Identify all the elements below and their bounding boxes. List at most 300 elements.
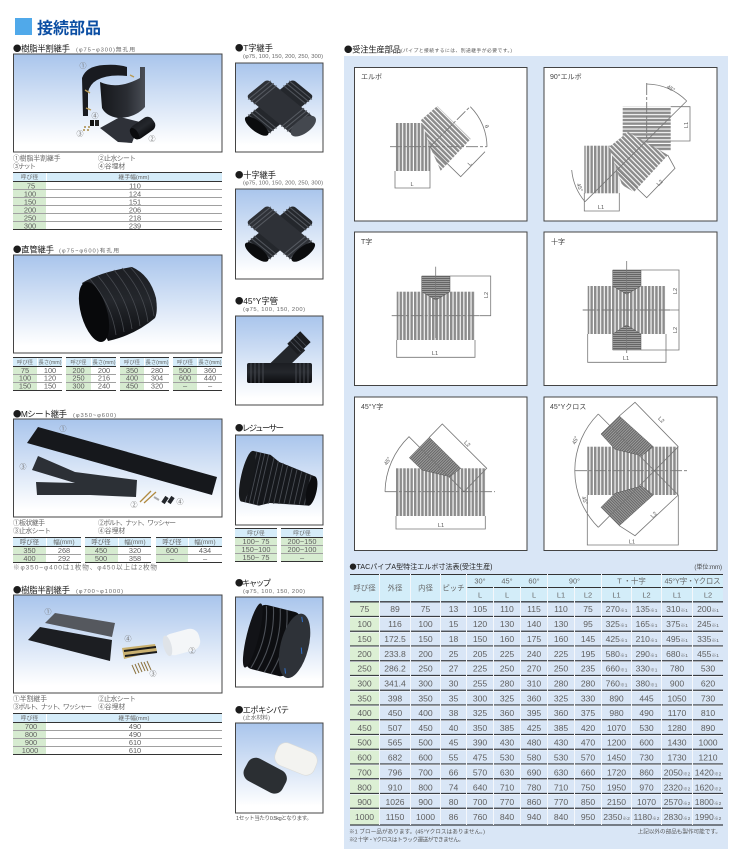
- tables: 長さ: 360: [204, 366, 216, 375]
- table: elbow dimensions: 310: [527, 678, 541, 688]
- table: elbow dimensions: 1730: [667, 752, 687, 762]
- table: elbow dimensions: 970: [639, 782, 654, 792]
- table: elbow dimensions: 350: [357, 693, 372, 703]
- table: elbow dimensions: 780: [527, 782, 541, 792]
- table: elbow dimensions: 682: [388, 752, 402, 762]
- table: reducer sizes: 150~100: [242, 545, 270, 554]
- tables: 幅: 幅(mm): [53, 537, 75, 546]
- tables: 長さ: 呼び径: [177, 358, 194, 366]
- table: elbow dimensions: 1720: [607, 767, 626, 777]
- table: elbow dimensions: L1: [673, 590, 681, 600]
- table: elbow dimensions: T ・十字: [617, 576, 646, 586]
- table: elbow dimensions: 350: [418, 693, 433, 703]
- table: elbow dimensions: 内径: [418, 584, 433, 592]
- table: 継手幅: 124: [129, 190, 141, 198]
- table: elbow dimensions: 210※1: [636, 634, 657, 644]
- table: elbow dimensions: 270: [527, 664, 541, 674]
- tables: 長さ: 300: [72, 381, 85, 390]
- table: elbow dimensions: 900: [418, 797, 433, 807]
- table: elbow dimensions: 398: [388, 693, 402, 703]
- table: elbow dimensions: 445: [639, 693, 654, 703]
- table: elbow dimensions: 530: [701, 664, 715, 674]
- note: 1セット当たり0.5kgとなります。: [236, 814, 312, 822]
- table: elbow dimensions: 290※1: [636, 649, 657, 659]
- tables: 幅: 呼び径: [162, 537, 182, 546]
- table: elbow dimensions: 700: [357, 767, 372, 777]
- tables: 長さ: 216: [98, 374, 110, 382]
- table: elbow dimensions: 105: [473, 604, 487, 614]
- tables: 長さ: 350: [126, 366, 138, 375]
- diagram: 90°エルボ: 45°: [575, 183, 583, 193]
- tables: 長さ: 呼び径: [17, 358, 34, 366]
- product photo: M-sheet joint: ④: [176, 498, 184, 506]
- tables: 幅: 幅(mm): [194, 537, 216, 546]
- table: elbow dimensions: L: [532, 590, 536, 600]
- table: elbow dimensions: 1000: [355, 812, 374, 822]
- panel: 直管継手: [13, 244, 222, 390]
- table: elbow dimensions: 233.8: [384, 649, 406, 659]
- table: elbow dimensions: [350, 574, 723, 825]
- table: elbow dimensions: 1070: [637, 797, 656, 807]
- product photo: half-split joint: ③: [76, 130, 84, 138]
- captions: ④谷埋材: [98, 162, 125, 170]
- table: elbow dimensions: 300: [418, 678, 433, 688]
- table: 継手幅: [13, 172, 222, 230]
- table: elbow dimensions: 395: [527, 708, 541, 718]
- table: elbow dimensions: 750: [581, 782, 595, 792]
- table: elbow dimensions: 660※1: [606, 664, 627, 674]
- product photo: large half-split joint: ①: [44, 608, 52, 616]
- table: elbow dimensions: 25: [449, 649, 458, 659]
- table: 継手幅: 1000: [22, 746, 38, 755]
- heading: エポキシパテ: ●エポキシパテ: [235, 704, 289, 716]
- table: elbow dimensions: 475: [473, 752, 487, 762]
- panel: made-to-order background: [344, 56, 728, 849]
- label: 45°Y字: [361, 403, 383, 411]
- table: elbow dimensions: 40: [449, 723, 458, 733]
- table: elbow dimensions: 840: [554, 812, 568, 822]
- table: reducer sizes: 200~100: [288, 545, 316, 554]
- table: elbow dimensions: 530: [554, 752, 568, 762]
- table: elbow dimensions: 490: [639, 708, 654, 718]
- table: elbow dimensions: 2320※2: [664, 782, 690, 792]
- table: elbow dimensions: 35: [449, 693, 458, 703]
- sizes: (φ75, 100, 150, 200): [243, 589, 305, 595]
- diagram: 十字: L1: [623, 356, 629, 362]
- note: material: (止水材料): [243, 714, 270, 722]
- panel: 樹脂半割継手 φ75-300: [13, 42, 222, 230]
- table: elbow dimensions: 325: [554, 693, 568, 703]
- table: elbow dimensions: 18: [449, 634, 458, 644]
- diagram: 90°エルボ: L2: [656, 179, 665, 188]
- table: elbow dimensions: 250: [554, 664, 568, 674]
- table: elbow dimensions: 940: [527, 812, 541, 822]
- table: elbow dimensions: 1210: [698, 752, 718, 762]
- table: elbow dimensions: 1170: [668, 708, 686, 718]
- table: elbow dimensions: 1450: [607, 752, 626, 762]
- table: elbow dimensions: 1800※2: [695, 797, 721, 807]
- table: elbow dimensions: 375※1: [666, 619, 688, 629]
- table: elbow dimensions: 730: [701, 693, 715, 703]
- captions: ③ナット: [13, 162, 36, 170]
- table: elbow dimensions: 1430: [667, 738, 687, 748]
- table: 継手幅: 700: [25, 722, 37, 731]
- table: elbow dimensions: 66: [449, 767, 458, 777]
- tables: 幅: 320: [129, 546, 141, 555]
- tables: 長さ: 250: [72, 374, 85, 382]
- panel: キャップ: [235, 577, 323, 687]
- captions: ②ボルト、ナット、ワッシャー: [98, 519, 176, 527]
- panel: レジューサー: [235, 422, 323, 562]
- table: elbow dimensions: 86: [449, 812, 458, 822]
- tables: 長さ: 100: [44, 366, 56, 375]
- table: elbow dimensions: 455※1: [697, 649, 719, 659]
- table: elbow dimensions: 385: [500, 723, 514, 733]
- table: elbow dimensions: L2: [704, 590, 712, 600]
- product photo: T joint: [236, 63, 323, 152]
- table: elbow dimensions: 250: [418, 664, 433, 674]
- label: エルボ: [361, 73, 382, 81]
- table: elbow dimensions: 565: [388, 738, 402, 748]
- table: elbow dimensions: 80: [449, 797, 458, 807]
- table: 継手幅: 490: [129, 722, 141, 731]
- table: elbow dimensions: 360: [500, 708, 514, 718]
- table: elbow dimensions: 710: [500, 782, 514, 792]
- table: elbow dimensions: 430: [500, 738, 514, 748]
- table: elbow dimensions: L2: [584, 590, 592, 600]
- table: elbow dimensions: 2150: [607, 797, 626, 807]
- table: elbow dimensions: 900: [670, 678, 684, 688]
- table: elbow dimensions: 1420※2: [695, 767, 721, 777]
- diagram: T字: L2: [484, 292, 490, 298]
- table: 継手幅: 200: [24, 206, 36, 214]
- captions: ①半割継手: [13, 694, 47, 703]
- table: elbow dimensions: 530: [639, 723, 654, 733]
- tables: 長さ: 長さ(mm): [39, 359, 62, 366]
- heading: 直管継手: [13, 244, 119, 256]
- table: 継手幅: 610: [129, 738, 141, 747]
- table: elbow dimensions: 570: [581, 752, 595, 762]
- product photo: epoxy putty: [236, 723, 323, 813]
- note: ※φ350~φ400は1枚物、φ450以上は2枚物: [13, 562, 157, 572]
- table: elbow dimensions: 530: [500, 752, 514, 762]
- product photo: M-sheet joint: ③: [20, 463, 26, 471]
- table: elbow dimensions: 310※1: [666, 604, 688, 614]
- captions: ④谷埋材: [98, 702, 125, 711]
- table: elbow dimensions: 500: [418, 738, 433, 748]
- product photo: cross joint: [236, 189, 323, 279]
- tables: 長さ: 長さ(mm): [93, 359, 116, 366]
- table: elbow dimensions: 620: [701, 678, 715, 688]
- tables: 幅: 268: [58, 546, 70, 555]
- table: elbow dimensions: 286.2: [384, 664, 406, 674]
- table: 継手幅: 218: [129, 214, 141, 222]
- heading: キャップ: ●キャップ: [235, 577, 272, 589]
- tables: 長さ: –: [183, 381, 188, 390]
- table: elbow dimensions: 1950: [607, 782, 626, 792]
- table: elbow dimensions: 130: [500, 619, 514, 629]
- table: elbow dimensions: 325: [473, 708, 487, 718]
- table: elbow dimensions: 270※1: [606, 604, 627, 614]
- table: elbow dimensions: 450: [357, 723, 372, 733]
- table: elbow dimensions: 1620※2: [695, 782, 721, 792]
- table: elbow dimensions: 360: [527, 693, 541, 703]
- table: elbow dimensions: 495※1: [666, 634, 688, 644]
- table: 継手幅: [13, 714, 222, 755]
- table: elbow dimensions: 450: [418, 723, 433, 733]
- table: elbow dimensions: 425: [527, 723, 541, 733]
- table: 継手幅: 110: [129, 182, 141, 190]
- footnotes: ※2 十字・Yクロスはトラック運送ができません。: [349, 836, 464, 844]
- table: elbow dimensions: 335※1: [697, 634, 719, 644]
- table: elbow dimensions: 630: [554, 767, 568, 777]
- table: elbow dimensions: 890: [701, 723, 715, 733]
- table: elbow dimensions: L2: [642, 590, 651, 600]
- table: elbow dimensions: 810: [701, 708, 715, 718]
- table: elbow dimensions: 100: [418, 619, 433, 629]
- table: elbow dimensions: 300: [357, 678, 372, 688]
- table: elbow dimensions: 770: [500, 797, 514, 807]
- diagram: 45°Yクロス: 45°: [580, 496, 588, 506]
- product photo: cap: [236, 597, 323, 687]
- table: elbow dimensions: 160: [554, 634, 568, 644]
- table: 継手幅: 900: [25, 738, 37, 747]
- product photo: large half-split joint: ③: [150, 670, 156, 678]
- table: elbow dimensions: 1026: [385, 797, 405, 807]
- heading: 45°Y字管: ●45°Y字管: [235, 295, 279, 307]
- panel: 45°Y字管: [235, 295, 323, 405]
- panel: 十字継手: [235, 169, 323, 279]
- tables: 長さ: 長さ(mm): [146, 359, 169, 366]
- diagram: 45°Yクロス: L2: [656, 416, 665, 425]
- table: elbow dimensions: 1000: [416, 812, 435, 822]
- table: elbow dimensions: 110: [500, 604, 514, 614]
- diagram: T字: L1: [432, 351, 438, 357]
- product photo: M-sheet joint: ②: [130, 501, 138, 509]
- product photo: large half-split joint: ②: [188, 647, 196, 655]
- diagram: 90°エルボ: 45°: [665, 84, 676, 94]
- heading: 樹脂半割継手 大口径: [13, 584, 123, 596]
- table: elbow dimensions: 90°: [569, 576, 580, 586]
- panel: T字継手: [235, 42, 323, 152]
- table: elbow dimensions: 760: [473, 812, 487, 822]
- table: elbow dimensions: 640: [473, 782, 487, 792]
- table: elbow dimensions: 600: [639, 738, 654, 748]
- table: elbow dimensions: 450: [388, 708, 402, 718]
- tables: 幅: 350: [23, 546, 36, 555]
- table: elbow dimensions: 75: [583, 604, 593, 614]
- table: elbow dimensions: 200: [357, 649, 372, 659]
- table: elbow dimensions: 385: [554, 723, 568, 733]
- table: elbow dimensions: 890: [609, 693, 624, 703]
- table: elbow dimensions: 75: [360, 604, 369, 614]
- captions: ①板状継手: [13, 518, 45, 527]
- table: 継手幅: 100: [24, 190, 36, 198]
- table: elbow dimensions: 580: [527, 752, 541, 762]
- tables: 幅: 358: [129, 554, 141, 563]
- diagram: エルボ: θ: [483, 124, 489, 129]
- table: elbow dimensions: 140: [527, 619, 541, 629]
- table: elbow dimensions: 430: [554, 738, 568, 748]
- table: elbow dimensions: 860: [639, 767, 654, 777]
- table: elbow dimensions: 2350※2: [603, 812, 630, 822]
- table: elbow dimensions: 110: [554, 604, 568, 614]
- table: reducer sizes: 呼び径: [247, 529, 265, 537]
- table: elbow dimensions: 205: [473, 649, 487, 659]
- table: elbow dimensions: 700: [473, 797, 487, 807]
- heading: レジューサー: ●レジューサー: [235, 422, 284, 434]
- tables: 幅: 600: [166, 546, 178, 555]
- product photo: half-split joint: ④: [92, 112, 98, 120]
- tables: 幅: 500: [95, 554, 107, 563]
- diagram: 十字: [544, 232, 717, 386]
- table: 継手幅: 呼び径: [21, 173, 38, 181]
- heading: 十字継手: ●十字継手: [235, 169, 276, 181]
- table: reducer sizes: 呼び径: [293, 529, 311, 537]
- heading: 樹脂半割継手: [13, 42, 135, 54]
- table: elbow dimensions: 235: [581, 664, 595, 674]
- table: elbow dimensions: 2570※2: [664, 797, 690, 807]
- diagram: 90°エルボ: L1: [598, 205, 604, 211]
- table: elbow dimensions: 呼び径: [353, 584, 376, 592]
- product photo: half-split joint: ②: [148, 135, 156, 143]
- tables: 長さ: [13, 358, 222, 390]
- table: elbow dimensions: 390: [473, 738, 487, 748]
- table: elbow dimensions: 280: [581, 678, 595, 688]
- heading: Mシート継手: (φ350~φ600): [73, 413, 116, 419]
- table: elbow dimensions: 45: [449, 738, 458, 748]
- table: elbow dimensions: L1: [612, 590, 621, 600]
- table: elbow dimensions: 770: [554, 797, 568, 807]
- table: elbow dimensions: L: [505, 590, 509, 600]
- captions: ②止水シート: [98, 154, 136, 162]
- captions: [13, 518, 176, 535]
- captions: [13, 154, 136, 170]
- table: elbow dimensions: 135※1: [636, 604, 657, 614]
- table: elbow dimensions: 240: [527, 649, 541, 659]
- table: elbow dimensions: 900: [357, 797, 372, 807]
- heading: Mシート継手: [13, 408, 116, 420]
- table: elbow dimensions: 175: [527, 634, 541, 644]
- table: elbow dimensions: 55: [449, 752, 458, 762]
- table: elbow dimensions: 116: [388, 619, 402, 629]
- table: 継手幅: 300: [24, 221, 36, 230]
- table: elbow dimensions: 400: [357, 708, 372, 718]
- table: 継手幅: 151: [129, 198, 141, 206]
- table: reducer sizes: 100~ 75: [243, 537, 269, 546]
- table: elbow dimensions: 507: [388, 723, 402, 733]
- table: 継手幅: 呼び径: [21, 714, 38, 722]
- table: elbow dimensions: 172.5: [384, 634, 406, 644]
- tables: 幅: 400: [23, 554, 36, 563]
- table: elbow dimensions: 760※1: [606, 678, 627, 688]
- table: 継手幅: 継手幅(mm): [119, 714, 150, 722]
- captions: ③ボルト、ナット、ワッシャー: [13, 703, 92, 711]
- table: 継手幅: 490: [129, 730, 141, 739]
- table: elbow dimensions: 1280: [667, 723, 687, 733]
- product photo: half-split joint: [14, 54, 222, 152]
- table: elbow dimensions: 910: [388, 782, 402, 792]
- table: elbow dimensions: 341.4: [384, 678, 406, 688]
- table: elbow dimensions: 400: [418, 708, 433, 718]
- table: elbow dimensions: 710: [554, 782, 568, 792]
- diagram: 90°エルボ: [544, 68, 717, 221]
- panel: 樹脂半割継手 φ700-1000: [13, 584, 222, 755]
- diagram: 45°Yクロス: L2: [650, 511, 659, 520]
- table: elbow dimensions: 95: [583, 619, 593, 629]
- heading: 直管継手: (φ75~φ600)有孔用: [59, 246, 119, 254]
- table: elbow dimensions: 680※1: [666, 649, 688, 659]
- tables: 幅: 292: [58, 554, 70, 563]
- table: elbow dimensions: 150: [473, 634, 487, 644]
- diagram: 45°Yクロス: [544, 397, 717, 550]
- table: elbow dimensions: 250: [357, 664, 372, 674]
- label: 45°Yクロス: [550, 403, 586, 411]
- table: elbow dimensions: 100: [357, 619, 372, 629]
- tables: 幅: 呼び径: [91, 537, 111, 546]
- product photo: straight joint: [14, 255, 222, 353]
- label: 90°エルボ: [550, 73, 582, 81]
- table: elbow dimensions: 1150: [386, 812, 404, 822]
- tables: 長さ: 75: [21, 366, 29, 375]
- diagram: 45°Y字: [354, 397, 527, 550]
- product photo: large half-split joint: [14, 595, 222, 693]
- tables: 長さ: 100: [19, 374, 31, 382]
- diagram: 十字: L2: [673, 327, 679, 333]
- table: elbow dimensions: 225: [554, 649, 568, 659]
- table: elbow dimensions: 580※1: [606, 649, 627, 659]
- table: elbow dimensions: 300: [473, 693, 487, 703]
- table: elbow dimensions: 850: [581, 797, 595, 807]
- product photo: reducer: [236, 435, 323, 525]
- tables: 長さ: 呼び径: [71, 358, 87, 366]
- heading: Mシート継手: ●Mシート継手: [13, 408, 67, 420]
- table: elbow dimensions: L1: [557, 590, 565, 600]
- heading: 樹脂半割継手 大口径: ●樹脂半割継手: [13, 584, 70, 596]
- table: elbow dimensions: 74: [449, 782, 458, 792]
- tables: 長さ: 304: [151, 374, 163, 382]
- table: 継手幅: 800: [25, 730, 37, 739]
- table: elbow dimensions: 2830※2: [664, 812, 690, 822]
- table: elbow dimensions: 225: [473, 664, 487, 674]
- table: elbow dimensions: 470: [581, 738, 595, 748]
- panel: エポキシパテ: [235, 704, 323, 822]
- heading: T字継手: ●T字継手: [235, 42, 273, 54]
- tables: 幅: 呼び径: [20, 537, 40, 546]
- table: reducer sizes: –: [300, 553, 305, 562]
- diagram: 45°Y字: L2: [462, 440, 471, 449]
- heading: 樹脂半割継手: (φ75~φ300)無孔用: [76, 46, 135, 54]
- table: elbow dimensions: 150: [418, 634, 433, 644]
- label: T字: [361, 238, 372, 246]
- product photo: M-sheet joint: ①: [60, 425, 66, 433]
- tables: 幅: 幅(mm): [124, 537, 146, 546]
- table: 継手幅: 150: [24, 198, 36, 206]
- product photo: M-sheet joint: [14, 419, 222, 517]
- tables: 長さ: 280: [151, 366, 163, 375]
- table: elbow dimensions: 480: [527, 738, 541, 748]
- table: elbow dimensions: 700: [418, 767, 433, 777]
- table: elbow dimensions: 115: [527, 604, 541, 614]
- sizes: (φ75, 100, 150, 200, 250, 300): [243, 180, 323, 186]
- table: elbow dimensions: 570: [473, 767, 487, 777]
- tables: 長さ: 600: [179, 374, 191, 382]
- table: elbow dimensions: 150: [357, 634, 372, 644]
- unit note: (単位:mm): [694, 563, 722, 571]
- table: elbow dimensions: 950: [581, 812, 595, 822]
- table: 継手幅: 239: [129, 221, 141, 230]
- table: elbow dimensions: 500: [357, 738, 372, 748]
